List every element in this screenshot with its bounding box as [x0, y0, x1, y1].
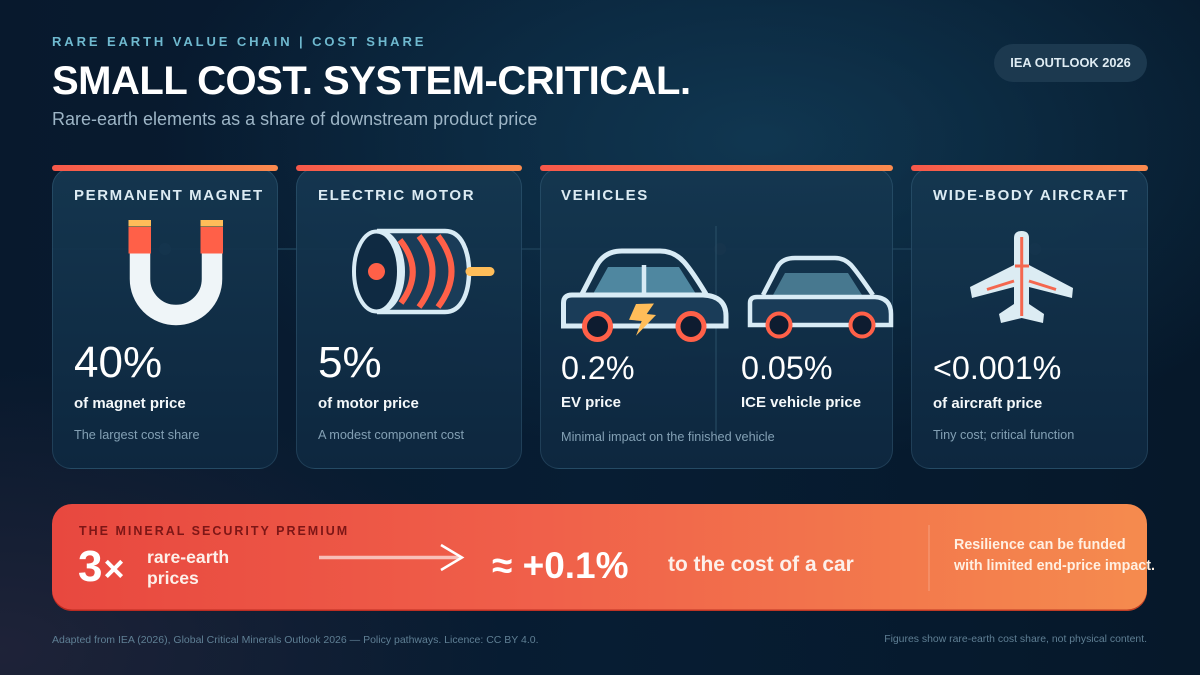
stat: 0.2%: 0.2%: [561, 350, 635, 386]
label: EV price: EV price: [561, 394, 621, 411]
panel: vehicles: [540, 165, 894, 469]
stat: +0.1%: ≈ +0.1%: [492, 545, 629, 586]
label: of magnet price: of magnet price: [74, 395, 186, 412]
panel heading: wide-body aircraft: WIDE-BODY AIRCRAFT: [933, 187, 1129, 204]
panel: permanent magnet: [52, 165, 278, 469]
takeaway text: with limited end-price impact.: [954, 558, 1155, 574]
label: ICE vehicle price: ICE vehicle price: [741, 394, 861, 411]
note: minimal impact: Minimal impact on the finished vehicle: [561, 430, 775, 444]
note: modest component cost: A modest component cost: [318, 428, 464, 442]
note: tiny cost: Tiny cost; critical function: [933, 428, 1074, 442]
banner heading: THE MINERAL SECURITY PREMIUM: [79, 524, 349, 538]
icon: electric vehicle: [561, 248, 728, 342]
icon: combustion car: [748, 256, 894, 338]
subtitle: Rare-earth elements as a share of downstream product price: [52, 109, 537, 129]
badge: IEA Outlook 2026: IEA OUTLOOK 2026: [1010, 55, 1131, 70]
label: of motor price: of motor price: [318, 395, 419, 412]
title: SMALL COST. SYSTEM-CRITICAL.: [52, 59, 691, 103]
label: to the cost of a car: to the cost of a car: [668, 553, 854, 576]
stat: 5%: 5%: [318, 338, 382, 387]
label: rare-earth prices: rare-earth: [147, 547, 229, 567]
banner: mineral security premium: [52, 504, 1147, 610]
footer: source: Adapted from IEA (2026), Global Critical Minerals Outlook 2026 — Policy pathways. Licence: CC BY 4.0.: [52, 634, 539, 646]
stat: 0.05%: 0.05%: [741, 350, 833, 386]
label: of aircraft price: of aircraft price: [933, 395, 1042, 412]
icon: electric motor: [352, 228, 494, 314]
label: rare-earth prices: [147, 547, 229, 588]
arrow: [319, 544, 464, 572]
panel heading: permanent magnet: PERMANENT MAGNET: [74, 187, 264, 204]
panel: wide-body aircraft: [911, 165, 1148, 469]
eyebrow: RARE EARTH VALUE CHAIN | COST SHARE: [52, 34, 426, 49]
panel: electric motor: [296, 165, 522, 469]
stat: 40%: 40%: [74, 338, 162, 387]
stat: 3x: 3×: [78, 542, 125, 591]
stat: <0.001%: <0.001%: [933, 350, 1061, 386]
takeaway text: [954, 537, 1155, 574]
badge: IEA Outlook 2026: [994, 44, 1147, 82]
label: rare-earth prices: prices: [147, 568, 199, 588]
note: largest cost share: The largest cost share: [74, 428, 200, 442]
panel heading: electric motor: ELECTRIC MOTOR: [318, 187, 475, 204]
footer: note: Figures show rare-earth cost share, not physical content.: [884, 634, 1147, 645]
takeaway text: Resilience can be funded: [954, 537, 1126, 553]
icon: horseshoe magnet: [128, 220, 223, 326]
icon: aircraft: [970, 231, 1073, 323]
panel heading: vehicles: VEHICLES: [561, 187, 649, 204]
